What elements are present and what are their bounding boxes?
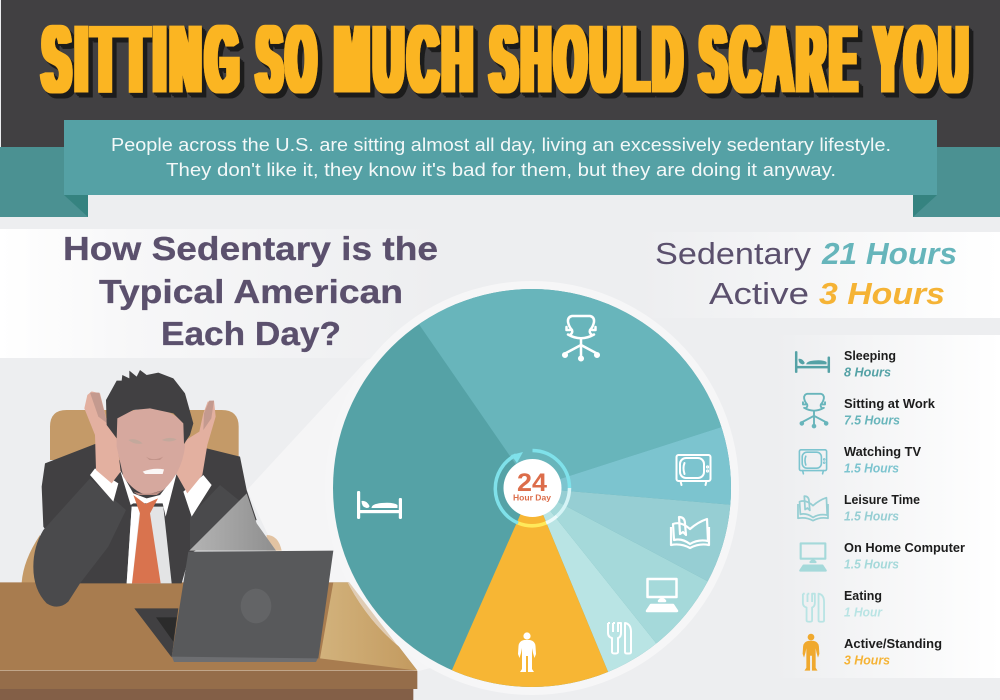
icon: chair bbox=[563, 316, 599, 360]
light beam from man to chart bbox=[247, 300, 500, 672]
chart outer ring bbox=[325, 281, 739, 695]
ribbon text bbox=[111, 134, 891, 180]
cuffs bbox=[90, 468, 212, 517]
center label: 24 bbox=[517, 469, 547, 497]
icon: computer bbox=[647, 579, 677, 611]
title: MUCH bbox=[335, 6, 477, 113]
legend: watching TV: Watching TV bbox=[844, 445, 922, 459]
title bbox=[42, 6, 972, 113]
legend: sleeping bbox=[795, 349, 896, 380]
heading: How Sedentary is the bbox=[63, 230, 438, 267]
legend: eating: Eating bbox=[844, 589, 882, 603]
laptop bbox=[134, 551, 333, 662]
pie chart bbox=[333, 281, 739, 695]
face bbox=[117, 408, 185, 495]
slice: sitting at work bbox=[420, 289, 722, 479]
panel: heading background bbox=[0, 229, 440, 358]
slices bbox=[333, 289, 731, 687]
icon: bed bbox=[357, 491, 402, 519]
icon: tv bbox=[676, 455, 710, 485]
legend: eating bbox=[803, 589, 883, 622]
legend: active/standing: 3 Hours bbox=[844, 654, 890, 668]
legend: active/standing bbox=[803, 634, 942, 671]
icon: book bbox=[671, 517, 709, 548]
hair bbox=[106, 370, 193, 444]
slice: active bbox=[452, 514, 608, 687]
title: SITTING bbox=[42, 6, 244, 113]
legend: leisure time: Leisure Time bbox=[844, 493, 920, 507]
header band bbox=[1, 0, 1000, 147]
panel: sedentary and active totals: Sedentary bbox=[655, 236, 812, 271]
ring tint over desk bbox=[348, 582, 397, 645]
legend: home computer: On Home Computer bbox=[844, 541, 965, 555]
icon: standing person bbox=[518, 632, 536, 672]
legend: sitting at work: Sitting at Work bbox=[844, 397, 935, 411]
legend: home computer bbox=[800, 541, 965, 572]
ribbon text: People across the U.S. are sitting almost all day, living an excessively sedentary lifestyle. bbox=[111, 134, 891, 155]
legend: watching TV: 1.5 Hours bbox=[844, 462, 899, 476]
slice: eating bbox=[543, 511, 656, 672]
title: SO bbox=[257, 6, 320, 113]
legend: sleeping: 8 Hours bbox=[844, 366, 891, 380]
panel: sedentary and active totals bbox=[640, 232, 1000, 318]
ribbon banner bbox=[0, 120, 1000, 217]
panel: sedentary and active totals: Active bbox=[709, 276, 809, 311]
panel: sedentary and active totals: 3 Hours bbox=[819, 276, 945, 311]
title: SHOULD bbox=[490, 6, 686, 113]
hands bbox=[84, 391, 216, 493]
right sleeve bbox=[190, 485, 247, 550]
legend: leisure time: 1.5 Hours bbox=[844, 510, 899, 524]
panel: legend background bbox=[775, 335, 1000, 678]
clock ring bbox=[495, 450, 570, 526]
left sleeve bbox=[33, 478, 126, 607]
slice: leisure time bbox=[558, 490, 730, 581]
legend: home computer: 1.5 Hours bbox=[844, 558, 899, 572]
slice: watching TV bbox=[560, 427, 731, 504]
legend: active/standing: Active/Standing bbox=[844, 637, 942, 651]
legend: eating: 1 Hour bbox=[844, 606, 883, 620]
suit bbox=[42, 443, 257, 583]
heading: Typical American bbox=[99, 273, 403, 310]
panel: sedentary and active totals: 21 Hours bbox=[821, 236, 957, 271]
legend: sleeping: Sleeping bbox=[844, 349, 896, 363]
center label: Hour Day bbox=[513, 493, 551, 503]
heading bbox=[63, 230, 438, 352]
legend: sitting at work: 7.5 Hours bbox=[844, 414, 900, 428]
legend: sitting at work bbox=[800, 394, 935, 428]
illustration: stressed man at desk bbox=[0, 370, 417, 700]
desk bbox=[0, 582, 417, 700]
ribbon text: They don't like it, they know it's bad for them, but they are doing it anyway. bbox=[166, 159, 836, 180]
shirt and tie bbox=[120, 470, 177, 583]
heading: Each Day? bbox=[161, 315, 341, 352]
center label bbox=[504, 459, 562, 517]
slice: home computer bbox=[550, 502, 708, 644]
chair bbox=[22, 410, 282, 583]
slice: sleeping bbox=[333, 289, 731, 687]
legend: watching TV bbox=[799, 445, 922, 476]
legend: leisure time bbox=[798, 493, 920, 524]
gray wedge bbox=[189, 493, 276, 551]
icon: fork and knife bbox=[608, 623, 631, 654]
